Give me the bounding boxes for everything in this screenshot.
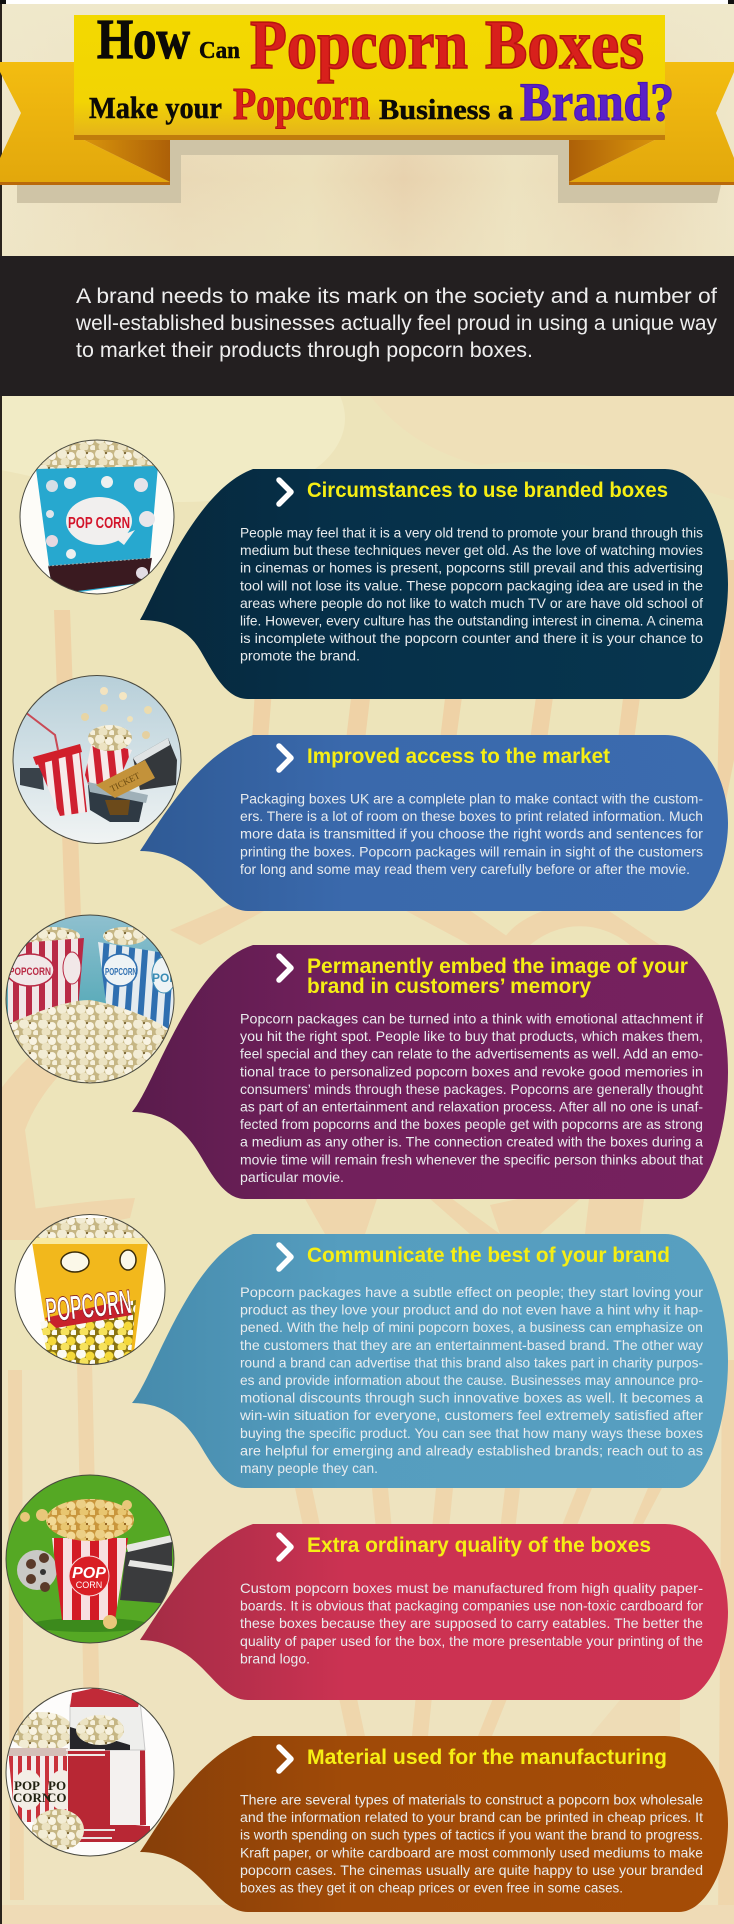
panel: communicate the best of your brand bbox=[132, 1234, 728, 1488]
intro text: to market their products through popcorn boxes. bbox=[76, 339, 533, 362]
body text: boards. It is obvious that packaging companies use non-toxic cardboard for bbox=[240, 1598, 703, 1614]
title text: Boxes bbox=[485, 7, 644, 84]
panel: material used for the manufacturing bbox=[140, 1736, 728, 1912]
chevron icon bbox=[279, 746, 291, 770]
body text: is incomplete without the popcorn counter and there it is your chance to bbox=[240, 630, 703, 646]
heading: Communicate the best of your brand bbox=[307, 1244, 670, 1267]
title text: Brand? bbox=[520, 72, 674, 132]
body text: Popcorn packages can be turned into a think with emotional attachment if bbox=[240, 1010, 703, 1026]
body text: these boxes because they are supposed to carry eatables. The better the bbox=[240, 1615, 703, 1631]
title text: Popcorn bbox=[250, 7, 468, 84]
panel: permanently embed the image bbox=[132, 945, 728, 1199]
intro text: well-established businesses actually feel proud in using a unique way bbox=[75, 312, 717, 335]
speech bubble bbox=[140, 469, 728, 699]
body text: motional discounts through such innovative boxes as well. It becomes a bbox=[240, 1390, 703, 1406]
body text: boxes as they get it on cheap prices or even free in some cases. bbox=[240, 1880, 623, 1896]
image: striped popcorn boxes: POPCORN bbox=[105, 967, 137, 978]
body text: are helpful for emerging and already established brands; reach out to as bbox=[240, 1442, 703, 1458]
body text: the customers that they are an entertainment-based brand. The other way bbox=[240, 1337, 703, 1353]
image: blue popcorn bucket bbox=[20, 440, 174, 596]
chevron icon bbox=[279, 956, 291, 980]
image: striped popcorn boxes bbox=[6, 915, 177, 1085]
body text: and the information related to your brand can be printed in cheap prices. It bbox=[240, 1809, 703, 1825]
title text bbox=[89, 7, 674, 132]
body text: quality of paper used for the box, the more presentable your printing of the bbox=[240, 1633, 703, 1649]
panel: circumstances to use branded boxes bbox=[140, 469, 728, 699]
right ribbon tail bbox=[569, 62, 734, 185]
body text: as part of an entertainment and relaxation process. After all no one is unaf- bbox=[240, 1098, 703, 1114]
title text: Can bbox=[199, 38, 240, 64]
title text: Business a bbox=[379, 95, 513, 126]
body text: Packaging boxes UK are a complete plan to make contact with the custom- bbox=[240, 790, 703, 806]
image: yellow popcorn bucket bbox=[15, 1214, 165, 1365]
chevron icon bbox=[279, 1747, 291, 1771]
heading: Permanently embed the image of your bbox=[307, 955, 688, 978]
speech bubble bbox=[140, 735, 728, 911]
image: blue popcorn bucket: POP CORN bbox=[68, 515, 130, 532]
body text: particular movie. bbox=[240, 1169, 344, 1185]
image: cup popcorn ticket and clapper: TICKET bbox=[108, 770, 142, 794]
speech bubble bbox=[140, 1524, 728, 1700]
body text: Custom popcorn boxes must be manufactured from high quality paper- bbox=[240, 1580, 703, 1596]
title banner bbox=[0, 7, 734, 203]
title text: Make your bbox=[89, 90, 222, 125]
image: yellow popcorn bucket: POPCORN bbox=[44, 1283, 133, 1330]
chevron icon bbox=[279, 1245, 291, 1269]
body text: consumers’ minds through these packages. Popcorns are generally thought bbox=[240, 1081, 703, 1097]
image: red popcorn box on green: POP bbox=[72, 1565, 106, 1582]
speech bubble bbox=[140, 1736, 728, 1912]
body text: is worth spending on such types of tactics if you want the brand to progress. bbox=[240, 1827, 703, 1843]
image: popcorn machine and boxes: PO bbox=[48, 1778, 66, 1793]
body text: areas where people do not like to watch much TV or are have old school of bbox=[240, 595, 703, 611]
body text: more data is transmitted if you choose the right words and sentences for bbox=[240, 826, 703, 842]
body text: for long and some may read them very carefully before or after the movie. bbox=[240, 861, 690, 877]
intro text bbox=[75, 285, 717, 362]
body text: fected from popcorns and the boxes people get with popcorns are as strong bbox=[240, 1116, 703, 1132]
heading: Material used for the manufacturing bbox=[307, 1746, 667, 1769]
body text: movie time will remain fresh whenever the specific person thinks about that bbox=[240, 1151, 703, 1167]
body text: es and provide information about the cause. Businesses may announce pro- bbox=[240, 1372, 703, 1388]
body text: a medium as any other is. The connection created with the boxes during a bbox=[240, 1134, 703, 1150]
body text bbox=[240, 524, 703, 664]
body text: product as they love your product and do not even have a hint why it hap- bbox=[240, 1302, 703, 1318]
image: striped popcorn boxes: POPCORN bbox=[9, 966, 51, 978]
body text: you hit the right spot. People like to buy that products, which makes them, bbox=[240, 1028, 703, 1044]
body text bbox=[240, 790, 703, 877]
body text: medium but these techniques never get old. As the love of watching movies bbox=[240, 542, 703, 558]
body text: feel special and they can relate to the advertisements as well. Add an emo- bbox=[240, 1046, 703, 1062]
image: popcorn machine and boxes bbox=[6, 1688, 174, 1856]
intro text: A brand needs to make its mark on the society and a number of bbox=[76, 285, 717, 308]
body text: ers. There is a lot of room on these boxes to print related information. Much bbox=[240, 808, 703, 824]
chevron icon bbox=[279, 1535, 291, 1559]
banner shadow bbox=[17, 140, 721, 203]
body text: People may feel that it is a very old trend to promote your brand through this bbox=[240, 524, 703, 540]
heading: brand in customers’ memory bbox=[307, 975, 591, 998]
image: popcorn machine and boxes: CO bbox=[47, 1790, 66, 1805]
left ribbon tail bbox=[0, 62, 170, 185]
body text: tool will not lose its value. These popcorn packaging idea are used in the bbox=[240, 577, 703, 593]
chevron icon bbox=[279, 480, 291, 504]
body text: tional trace to personalized popcorn boxes and revoke good memories in bbox=[240, 1063, 703, 1079]
body text: pened. With the help of mini popcorn boxes, a business can emphasize on bbox=[240, 1319, 703, 1335]
body text: There are several types of materials to construct a popcorn box wholesale bbox=[240, 1792, 703, 1808]
speech bubble bbox=[132, 945, 728, 1199]
body text: printing the boxes. Popcorn packages will remain in sight of the customers bbox=[240, 843, 703, 859]
body text bbox=[239, 1284, 703, 1476]
right ribbon fold bbox=[569, 135, 665, 182]
body text: promote the brand. bbox=[240, 648, 360, 664]
title text: Popcorn bbox=[233, 78, 370, 129]
title text: How bbox=[97, 9, 190, 71]
panel: improved access to the market bbox=[140, 735, 728, 911]
body text: buying the specific product. You can see that how many ways these boxes bbox=[240, 1425, 703, 1441]
image: popcorn machine and boxes: POP bbox=[14, 1778, 40, 1793]
heading: Improved access to the market bbox=[307, 745, 610, 768]
body text bbox=[240, 1792, 703, 1896]
body text: many people they can. bbox=[240, 1460, 378, 1476]
image: popcorn machine and boxes: CORN bbox=[13, 1790, 52, 1805]
left ribbon fold bbox=[74, 135, 170, 182]
body text: life. However, every culture has the outstanding interest in cinema. A cinema bbox=[240, 612, 703, 628]
body text bbox=[240, 1010, 703, 1185]
intro band bbox=[0, 256, 734, 396]
yellow banner bbox=[74, 15, 665, 135]
body text: popcorn cases. The cinemas usually are quite happy to use your branded bbox=[240, 1862, 703, 1878]
body text: win-win situation for everyone, customers feel extremely satisfied after bbox=[239, 1407, 703, 1423]
image: cup popcorn ticket and clapper bbox=[13, 675, 182, 845]
heading bbox=[307, 955, 688, 998]
image: red popcorn box on green bbox=[6, 1475, 174, 1645]
heading: Extra ordinary quality of the boxes bbox=[307, 1534, 651, 1557]
image: red popcorn box on green: CORN bbox=[76, 1580, 102, 1590]
speech bubble bbox=[132, 1234, 728, 1488]
body text: brand logo. bbox=[240, 1650, 310, 1666]
body text: Popcorn packages have a subtle effect on people; they start loving your bbox=[240, 1284, 703, 1300]
body text: in cinemas or homes is present, popcorns still prevail and this advertising bbox=[240, 560, 703, 576]
image: striped popcorn boxes: POP bbox=[152, 971, 177, 985]
heading: Circumstances to use branded boxes bbox=[307, 479, 668, 502]
body text: round a brand can advertise that this brand also takes part in charity purpos- bbox=[240, 1354, 703, 1370]
body text: Kraft paper, or white cardboard are most commonly used mediums to make bbox=[240, 1844, 703, 1860]
panel: extra ordinary quality of the boxes bbox=[140, 1524, 728, 1700]
body text bbox=[240, 1580, 703, 1666]
